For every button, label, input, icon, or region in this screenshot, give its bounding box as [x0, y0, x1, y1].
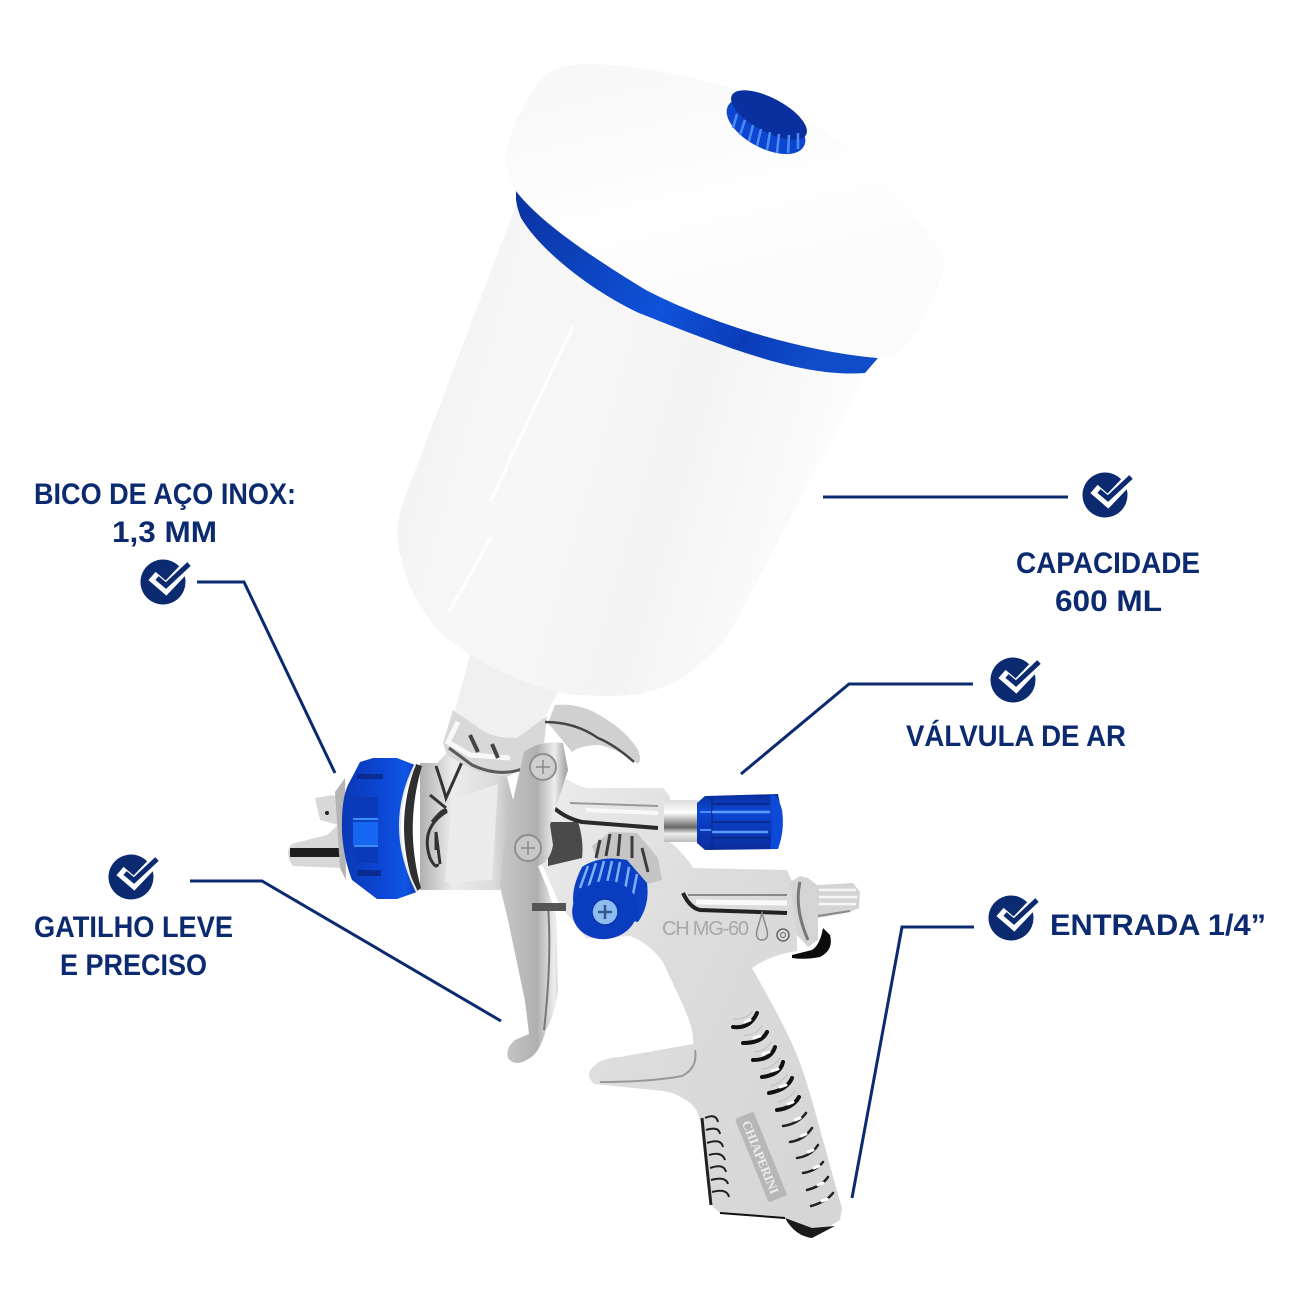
- callout: valvula de ar: [741, 658, 1126, 774]
- fluid adjuster chrome base: [592, 832, 662, 884]
- grip slots left: [702, 1116, 729, 1205]
- icon: check: [1082, 472, 1131, 518]
- nozzle air cap: [288, 778, 346, 880]
- grip slots right: [733, 1012, 833, 1206]
- bico label: [34, 478, 296, 549]
- entrada label: ENTRADA 1/4”: [1050, 909, 1266, 942]
- black gasket ring: [404, 764, 422, 892]
- adjuster screw: [592, 899, 618, 925]
- lid cap: [718, 80, 814, 166]
- gun base bottom: [785, 1218, 835, 1238]
- head chrome folds: [427, 762, 462, 866]
- gatilho label: [34, 911, 233, 982]
- callout: gatilho: [34, 854, 501, 1021]
- black air hose: [792, 928, 831, 959]
- gun grip and frame: [540, 777, 842, 1237]
- blue air valve knob: [697, 794, 783, 850]
- rear adjuster knob: [790, 876, 860, 947]
- callout: entrada: [852, 896, 1266, 1198]
- frame chrome reflections: [553, 803, 787, 1218]
- capacidade label: 600 ML: [1055, 585, 1162, 618]
- capacidade label: CAPACIDADE: [1016, 547, 1200, 580]
- callout: capacidade: [823, 472, 1200, 618]
- icon: check: [140, 560, 189, 604]
- gatilho label: GATILHO LEVE: [34, 911, 233, 944]
- valvula label: VÁLVULA DE AR: [906, 719, 1126, 753]
- cup connector collar: [443, 710, 547, 777]
- callout: bico de aco inox: [34, 478, 335, 773]
- bico label: 1,3 MM: [112, 516, 217, 549]
- product photo: spray gun: [288, 64, 944, 1238]
- inner chrome under frame: [548, 822, 582, 866]
- brand plate: CHIAPERINI: [739, 1118, 782, 1196]
- paint cup neck: [455, 648, 561, 738]
- blue fluid adjuster knob: [567, 859, 648, 945]
- icon: check: [988, 896, 1037, 940]
- air valve stem: [664, 800, 698, 842]
- blue sealing band: [516, 191, 878, 374]
- icon: check: [108, 854, 157, 900]
- leader line: [190, 881, 501, 1021]
- bico label: BICO DE AÇO INOX:: [34, 478, 296, 511]
- cup lid: [506, 64, 944, 358]
- finger hook: [545, 705, 640, 764]
- capacidade label: [1016, 547, 1200, 618]
- leader line: [741, 684, 973, 774]
- trigger screws: [515, 754, 556, 861]
- cup highlight: [450, 328, 572, 610]
- engraved drop and circle marks: [757, 913, 789, 941]
- icon: check: [990, 658, 1039, 702]
- engraved model text: CH MG-60: [662, 918, 749, 940]
- paint cup body: [398, 205, 868, 696]
- leader line: [197, 582, 335, 773]
- blue fluid ring: [342, 758, 417, 899]
- head bright face: [445, 784, 498, 882]
- gun head: [420, 753, 513, 890]
- trigger: [500, 742, 568, 1063]
- leader line: [852, 927, 974, 1198]
- gatilho label: E PRECISO: [60, 949, 207, 982]
- leader line: [823, 496, 1068, 498]
- trigger rod: [532, 903, 566, 911]
